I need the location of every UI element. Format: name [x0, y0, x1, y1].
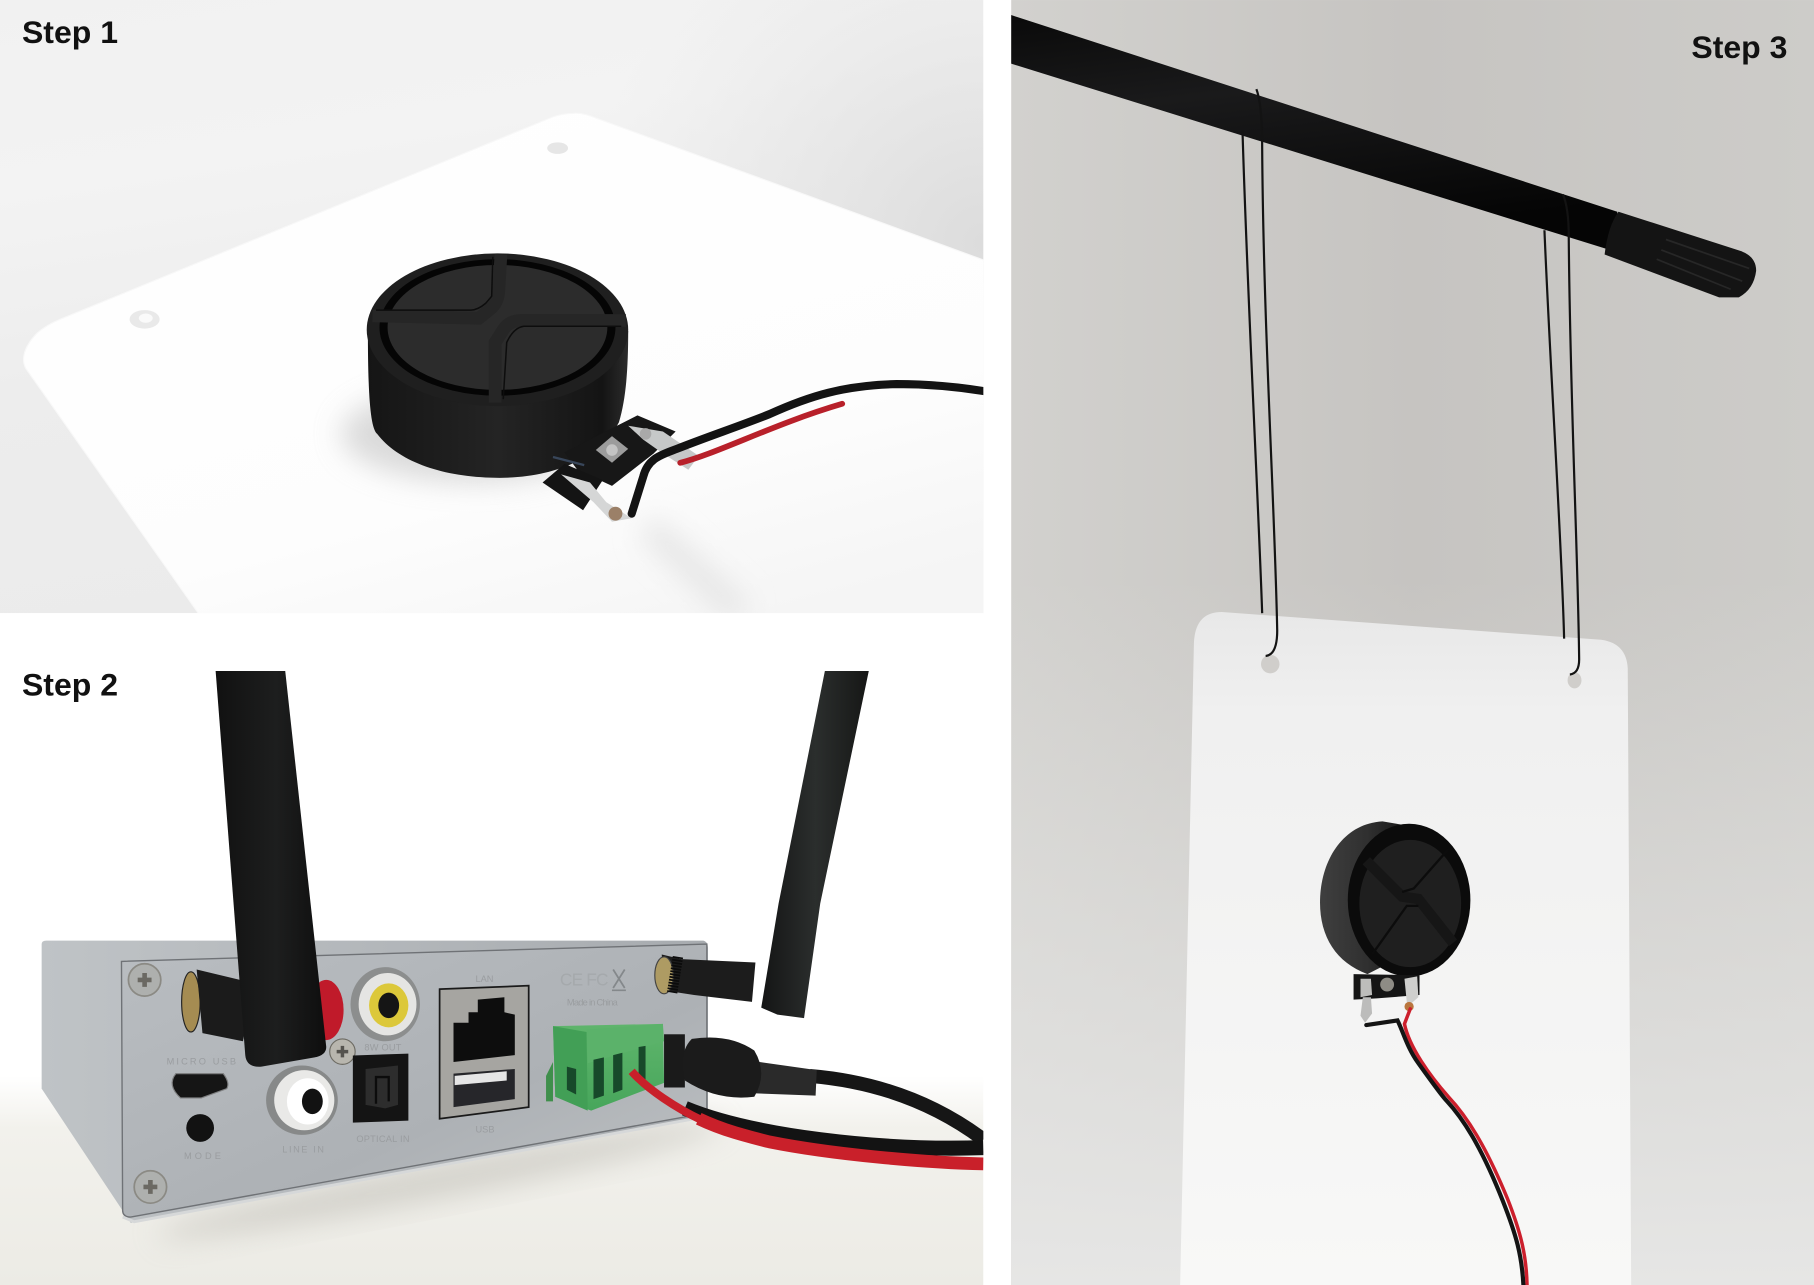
wire shadow: [648, 526, 740, 613]
speaker terminal bracket: [543, 415, 699, 522]
panel: Step 1 photo, speaker on plate: [0, 0, 1006, 631]
certification caption: Made in China: [567, 997, 619, 1007]
yellow RCA socket: 8W OUT: [364, 1042, 402, 1052]
Step 3 heading: Step 3: [1691, 30, 1787, 65]
LAN and USB port block: [440, 974, 529, 1135]
right antenna: [761, 665, 870, 1018]
red and black speaker wire: [632, 384, 983, 514]
Step 2 heading: Step 2: [22, 667, 118, 702]
bracket and terminals: [1354, 974, 1420, 1023]
micro USB port and button: MICRO USB: [167, 1056, 236, 1066]
plate holes: [1261, 655, 1581, 688]
device shadow: [170, 1120, 711, 1243]
panel: Step 2 photo, amplifier connection: [0, 613, 983, 1285]
rod end knob: [1605, 212, 1756, 297]
wall background: [1011, 0, 1814, 1285]
Step 1 heading: Step 1: [22, 15, 118, 50]
speaker cable: [1366, 1009, 1527, 1285]
speaker mounted on plate: [1320, 821, 1470, 976]
white hanging plate: [1180, 612, 1631, 1285]
certification marks: CE FC: [560, 970, 609, 990]
hanging strings: [1242, 89, 1579, 674]
recycling mark: [612, 969, 626, 990]
green terminal block: [546, 1024, 664, 1111]
red and black power wires: [632, 1071, 983, 1164]
cross ribs: [373, 255, 626, 403]
white mounting plate: [24, 113, 1006, 631]
white RCA socket: LINE IN: [282, 1144, 324, 1154]
right antenna base: [655, 954, 755, 1002]
black rod: [1011, 15, 1617, 252]
micro USB port and button: [167, 1056, 236, 1161]
panel: Step 3 photo, plate hanging from rod: [1011, 0, 1814, 1285]
LAN and USB port block: USB: [475, 1125, 495, 1135]
LAN and USB port block: LAN: [475, 974, 493, 984]
background surface: [0, 0, 983, 613]
panel screws: [128, 964, 355, 1203]
red RCA socket: [319, 980, 344, 1040]
power plug port: [664, 1034, 685, 1087]
white background and table: [0, 1098, 984, 1285]
left antenna: [215, 665, 326, 1067]
clipped antenna group: [182, 665, 870, 1067]
micro USB port and button: MODE: [184, 1151, 221, 1161]
optical input: [353, 1054, 410, 1144]
speaker shadow: [341, 385, 607, 482]
black power cable and plug: [683, 1037, 983, 1140]
round speaker: [367, 253, 628, 478]
yellow RCA socket: [351, 967, 420, 1052]
plate mounting holes: [130, 142, 568, 329]
speaker ribs: [1366, 849, 1453, 954]
amplifier body: [42, 941, 708, 1223]
white RCA socket: [266, 1066, 338, 1154]
optical input: OPTICAL IN: [356, 1134, 410, 1144]
left SMA connector: [181, 970, 244, 1042]
